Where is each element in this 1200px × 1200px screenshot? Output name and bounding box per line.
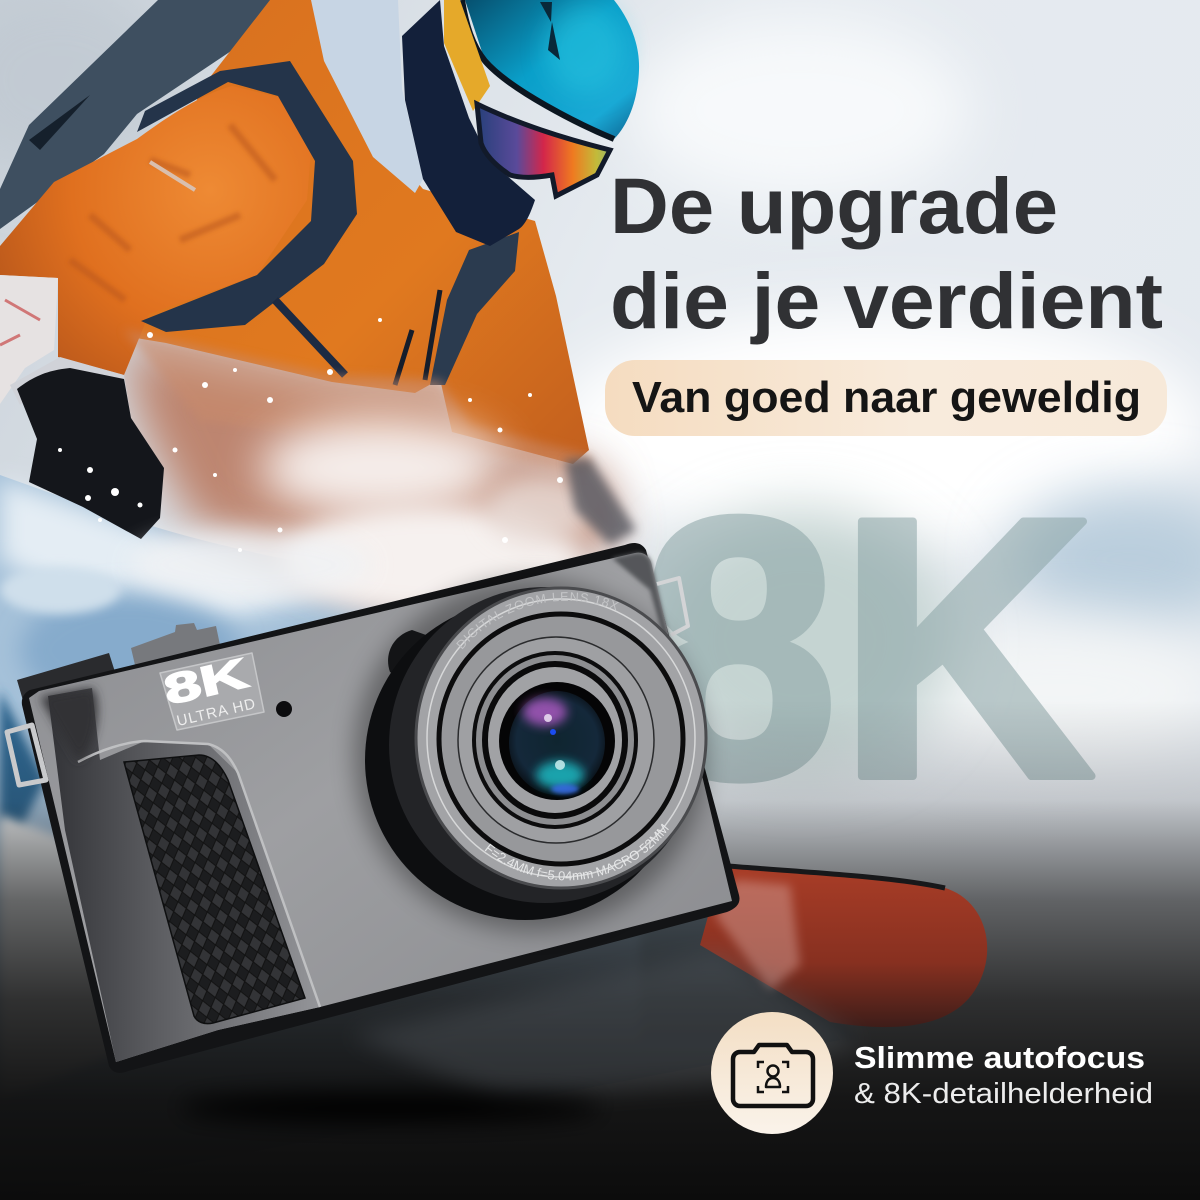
helmet bbox=[465, 0, 639, 139]
title: De upgrade bbox=[610, 161, 1058, 250]
skier bbox=[0, 0, 639, 539]
snowboard bbox=[700, 866, 987, 1027]
backpack bbox=[0, 0, 270, 229]
jacket sleeve bbox=[0, 86, 311, 375]
title bbox=[610, 161, 1163, 345]
bottom dark fade bbox=[0, 700, 1200, 1200]
front face bbox=[29, 553, 732, 1062]
feature caption: Slimme autofocus bbox=[854, 1040, 1145, 1075]
right edge shading bbox=[612, 553, 690, 730]
camera bbox=[4, 543, 740, 1067]
harness straps bbox=[137, 61, 357, 332]
feature caption bbox=[854, 1040, 1153, 1110]
snow spray bbox=[58, 318, 636, 615]
lens assembly: F=2.4MM f=5.04mm MACRO 52MM bbox=[484, 824, 669, 880]
white sleeve cuff bbox=[0, 275, 58, 404]
camera strap lug left bbox=[7, 725, 46, 785]
front sensor dot bbox=[276, 701, 292, 717]
lens assembly bbox=[342, 564, 718, 942]
8K ultra HD badge: ULTRA HD bbox=[175, 695, 257, 730]
subtitle pill bbox=[605, 360, 1167, 436]
subtitle pill: Van goed naar geweldig bbox=[632, 373, 1141, 422]
8K ultra HD badge bbox=[159, 649, 264, 730]
feature caption: & 8K-detailhelderheid bbox=[854, 1078, 1153, 1110]
camera strap lug right bbox=[657, 578, 688, 635]
grip zone bbox=[48, 688, 320, 1062]
camera shadow bbox=[180, 1093, 600, 1123]
lens assembly: DIGITAL ZOOM LENS 18X bbox=[456, 592, 619, 649]
goggles bbox=[477, 104, 610, 196]
slope light streak bbox=[350, 950, 860, 1100]
neck gaiter bbox=[402, 0, 535, 246]
top dial left bbox=[17, 653, 115, 704]
large 8K watermark: 8K bbox=[640, 442, 1095, 855]
jacket torso bbox=[124, 0, 589, 464]
mode dial bbox=[131, 623, 220, 665]
8K ultra HD badge: 8K bbox=[159, 649, 252, 714]
rubber grip bbox=[124, 755, 305, 1024]
glove bbox=[17, 368, 164, 539]
yellow strap bbox=[444, 0, 490, 111]
snow slope bbox=[0, 475, 860, 1200]
icon: autofocus camera bbox=[711, 1012, 833, 1134]
camera body silhouette bbox=[22, 543, 740, 1073]
hood bbox=[311, 0, 423, 193]
title: die je verdient bbox=[610, 256, 1163, 345]
snow spray under jacket bbox=[124, 345, 620, 610]
